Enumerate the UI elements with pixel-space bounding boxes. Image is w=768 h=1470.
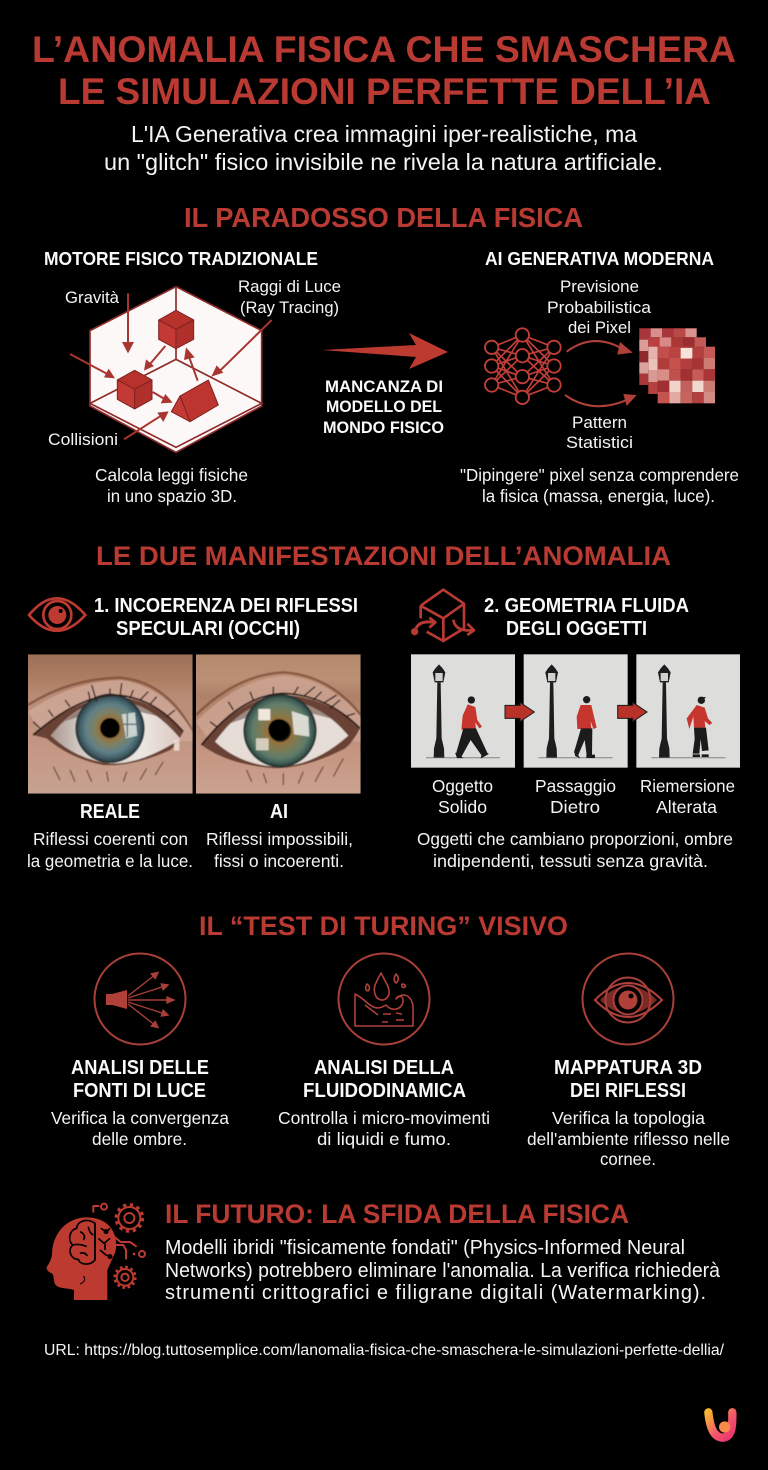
subheading: incoerenza: 1. INCOERENZA DEI RIFLESSI	[94, 595, 358, 617]
caption: riflessi impossibili	[206, 829, 353, 871]
label: raggi di luce: Raggi di Luce	[238, 277, 341, 296]
title: L’ANOMALIA FISICA CHE SMASCHERA	[32, 29, 736, 70]
caption: riflessi impossibili: Riflessi impossibili,	[206, 829, 353, 849]
panel: mappatura 3d dei riflessi	[527, 954, 730, 1169]
subheading: mappatura: MAPPATURA 3D	[554, 1056, 702, 1079]
label: reale: REALE	[80, 801, 140, 823]
panel: analisi delle fonti di luce	[51, 954, 229, 1149]
label: pattern statistici: Pattern	[572, 413, 627, 432]
subheading: analisi fluidodinamica	[303, 1056, 466, 1102]
icon: 3d eye	[582, 954, 674, 1044]
label: previsione probabilistica	[547, 277, 652, 337]
subheading: geometria fluida: 2. GEOMETRIA FLUIDA	[484, 595, 689, 617]
caption: dipingere pixel	[460, 465, 739, 506]
panel heading: motore fisico: MOTORE FISICO TRADIZIONALE	[44, 249, 318, 269]
icon: neural network	[485, 328, 561, 404]
title: LE SIMULAZIONI PERFETTE DELL’IA	[58, 71, 711, 112]
text: modelli ibridi: strumenti crittografici e filigrane digitali (Watermarking).	[165, 1282, 706, 1304]
label: previsione probabilistica: Previsione	[560, 277, 639, 296]
labels: sequence captions: Alterata	[656, 797, 717, 817]
label: ai: AI	[270, 801, 288, 823]
left cube	[117, 370, 152, 409]
logo	[708, 1412, 732, 1438]
arrow 1	[505, 702, 534, 722]
frame 3: altered reemergence	[636, 654, 740, 768]
subheading: geometria fluida: DEGLI OGGETTI	[506, 618, 647, 640]
caption: riflessi coerenti	[27, 829, 193, 871]
label: previsione probabilistica: Probabilistica	[547, 298, 652, 317]
labels: sequence captions: Dietro	[550, 797, 600, 817]
label: mancanza di modello del mondo fisico: MANCANZA DI	[325, 377, 443, 396]
label: mancanza di modello del mondo fisico: MODELLO DEL	[326, 397, 442, 416]
caption: oggetti che cambiano	[417, 829, 733, 871]
labels: sequence captions: Riemersione	[640, 776, 735, 796]
title	[32, 29, 736, 112]
caption: oggetti che cambiano: indipendenti, tessuti senza gravità.	[433, 851, 708, 871]
text: controlla micro-movimenti: di liquidi e fumo.	[317, 1129, 451, 1149]
labels: sequence captions: Passaggio	[535, 776, 616, 796]
panel: incoerenza dei riflessi	[27, 595, 361, 871]
subheading: analisi fluidodinamica: ANALISI DELLA	[314, 1056, 454, 1079]
label: previsione probabilistica: dei Pixel	[568, 318, 631, 337]
icon: light source rays	[94, 954, 186, 1044]
text: modelli ibridi	[165, 1237, 721, 1304]
panel heading: ai generativa: AI GENERATIVA MODERNA	[485, 249, 714, 269]
heading: test di turing visivo: IL “TEST DI TURING” VISIVO	[199, 911, 568, 941]
heading: il futuro: IL FUTURO: LA SFIDA DELLA FISICA	[165, 1199, 629, 1229]
diagram: physics engine cube	[70, 287, 272, 452]
label: pattern statistici	[566, 413, 633, 452]
labels: sequence captions: Oggetto	[432, 776, 493, 796]
heading: le due manifestazioni: LE DUE MANIFESTAZIONI DELL’ANOMALIA	[96, 541, 671, 571]
frame 1: solid object	[411, 654, 515, 768]
photo: ai eye	[196, 654, 361, 794]
subheading: analisi fluidodinamica: FLUIDODINAMICA	[303, 1079, 466, 1102]
frame 2: passing behind	[524, 654, 628, 768]
photo: real eye	[28, 654, 193, 794]
label: raggi di luce: (Ray Tracing)	[240, 298, 339, 317]
icon: eye	[29, 598, 85, 631]
source url: URL: https://blog.tuttosemplice.com/lanomalia-fisica-che-smaschera-le-simulazioni-perfette-dellia/	[44, 1342, 725, 1359]
top cube	[159, 310, 194, 349]
text: verifica topologia: dell'ambiente riflesso nelle	[527, 1129, 730, 1149]
text: controlla micro-movimenti	[278, 1108, 490, 1149]
caption: riflessi impossibili: fissi o incoerenti.	[214, 851, 344, 871]
text: verifica topologia	[527, 1108, 730, 1169]
sequence: person passing lamp post	[411, 654, 740, 768]
icon: fluid cube	[411, 590, 474, 641]
text: controlla micro-movimenti: Controlla i micro-movimenti	[278, 1108, 490, 1128]
caption: riflessi coerenti: la geometria e la luce.	[27, 851, 193, 871]
text: verifica topologia: Verifica la topologia	[552, 1108, 705, 1128]
label: mancanza di modello del mondo fisico	[323, 377, 444, 437]
subheading: analisi fonti: ANALISI DELLE	[71, 1056, 209, 1079]
text: modelli ibridi: Networks) potrebbero eliminare l'anomalia. La verifica richiederà	[165, 1260, 721, 1282]
caption: dipingere pixel: "Dipingere" pixel senza comprendere	[460, 465, 739, 485]
subtitle	[104, 121, 663, 175]
subtitle: un "glitch" fisico invisibile ne rivela la natura artificiale.	[104, 149, 663, 175]
label: pattern statistici: Statistici	[566, 433, 633, 452]
arrows	[70, 293, 272, 439]
prism	[171, 380, 218, 422]
label: gravità: Gravità	[65, 288, 120, 307]
text: verifica convergenza: Verifica la convergenza	[51, 1108, 229, 1128]
caption: riflessi coerenti: Riflessi coerenti con	[33, 829, 188, 849]
caption: oggetti che cambiano: Oggetti che cambiano proporzioni, ombre	[417, 829, 733, 849]
subheading: analisi fonti	[71, 1056, 209, 1102]
subheading: geometria fluida	[484, 595, 689, 640]
subheading: mappatura: DEI RIFLESSI	[570, 1079, 686, 1102]
subheading: incoerenza: SPECULARI (OCCHI)	[116, 618, 300, 640]
arrow: mancanza di modello	[322, 333, 448, 437]
caption: calcola leggi fisiche: in uno spazio 3D.	[107, 486, 237, 506]
caption: calcola leggi fisiche	[95, 465, 248, 506]
heading: il paradosso della fisica: IL PARADOSSO DELLA FISICA	[184, 202, 583, 233]
subtitle: L'IA Generativa crea immagini iper-realistiche, ma	[131, 121, 637, 147]
labels: sequence captions: Solido	[438, 797, 487, 817]
arrow 2	[618, 702, 647, 722]
panel: analisi della fluidodinamica	[278, 954, 490, 1149]
icon: pixel stack	[639, 328, 715, 403]
text: modelli ibridi: Modelli ibridi "fisicamente fondati" (Physics-Informed Neural	[165, 1237, 685, 1259]
label: raggi di luce	[238, 277, 341, 317]
icon: head with brain and gears	[47, 1204, 145, 1300]
text: verifica convergenza: delle ombre.	[92, 1129, 187, 1149]
panel: il futuro	[47, 1199, 721, 1304]
label: mancanza di modello del mondo fisico: MONDO FISICO	[323, 418, 444, 437]
panel: ai generativa moderna	[460, 249, 739, 506]
text: verifica topologia: cornee.	[600, 1149, 656, 1169]
arrows: network to pixels	[565, 341, 637, 406]
subheading: incoerenza	[94, 595, 358, 640]
subheading: analisi fonti: FONTI DI LUCE	[73, 1079, 206, 1102]
subheading: mappatura	[554, 1056, 702, 1102]
panel: motore fisico tradizionale	[44, 249, 341, 506]
caption: calcola leggi fisiche: Calcola leggi fisiche	[95, 465, 248, 485]
text: verifica convergenza	[51, 1108, 229, 1149]
caption: dipingere pixel: la fisica (massa, energia, luce).	[482, 486, 715, 506]
icon: fluid drop	[338, 954, 430, 1044]
panel: geometria fluida	[411, 590, 740, 871]
label: collisioni: Collisioni	[48, 430, 118, 449]
labels: sequence captions	[432, 776, 735, 817]
